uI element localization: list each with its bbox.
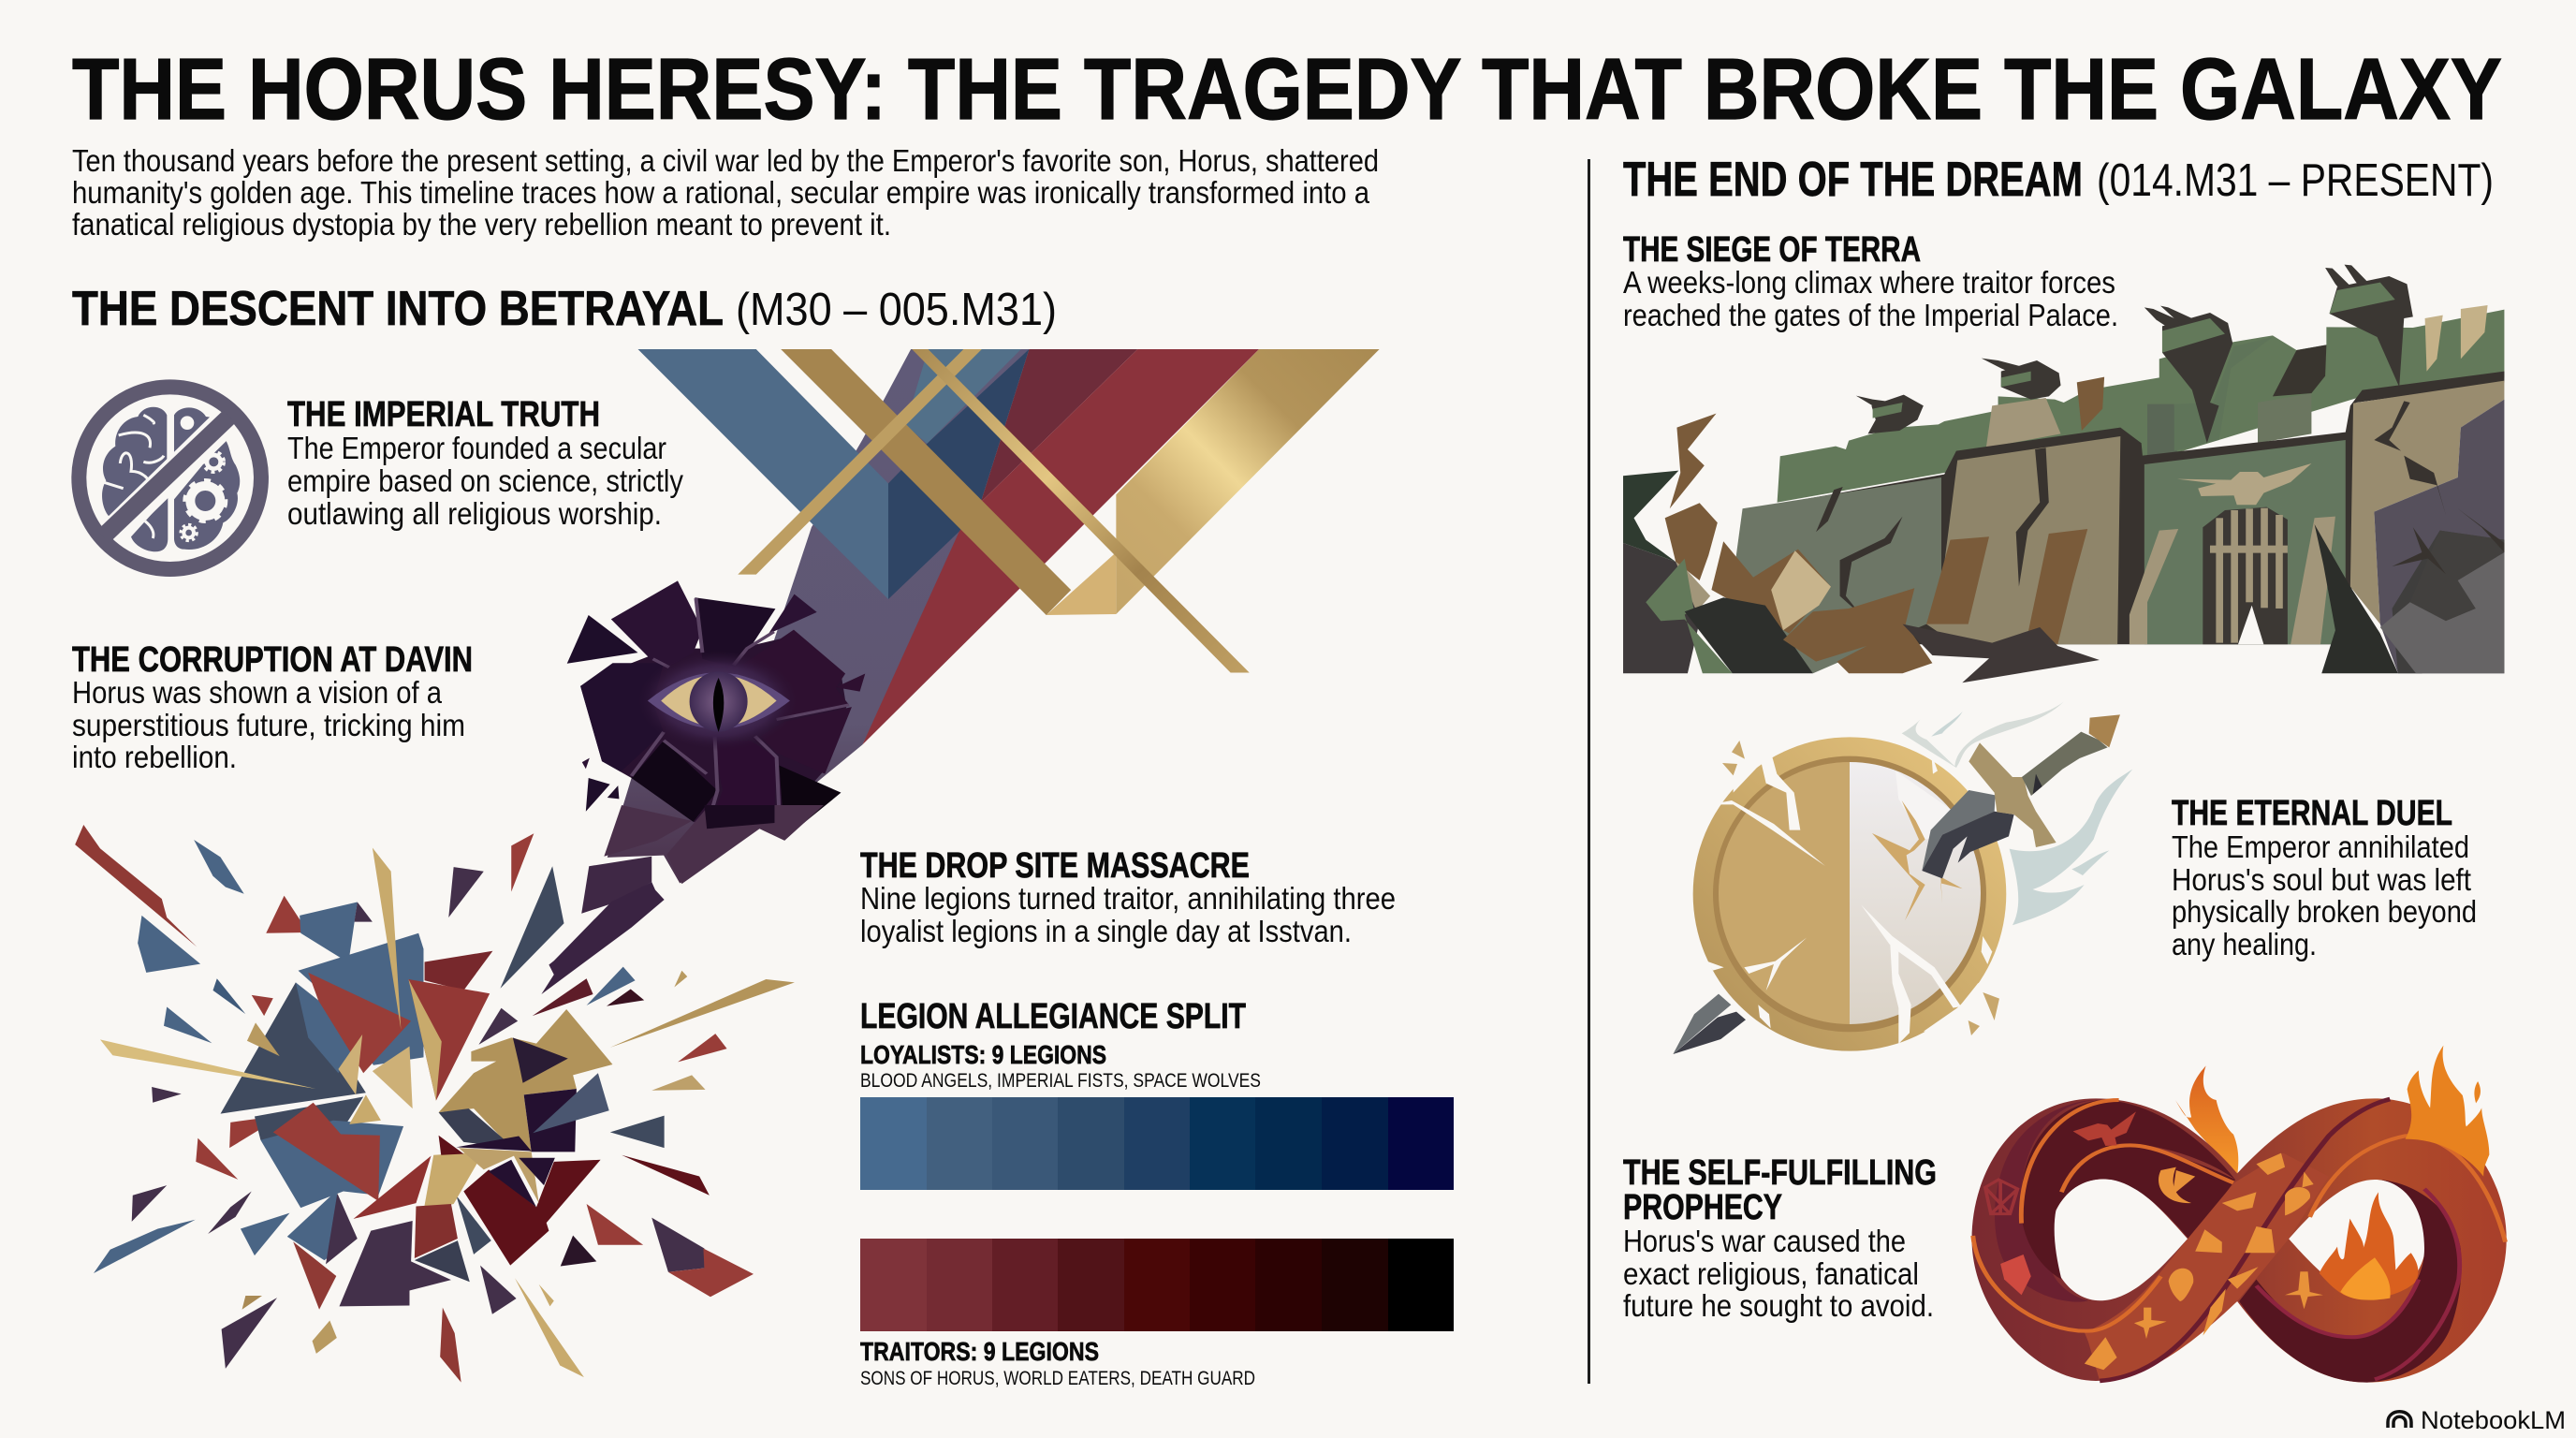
intro text: fanatical religious dystopia by the very rebellion meant to prevent it. — [72, 207, 891, 242]
block: the self-fulfilling prophecy: exact religious, fanatical — [1623, 1256, 1919, 1291]
block: the corruption at davin: THE CORRUPTION AT DAVIN — [72, 640, 473, 680]
gold chevron and crossing strips — [738, 349, 1380, 673]
label: loyalists — [860, 1040, 1261, 1092]
heading: the descent into betrayal: THE DESCENT INTO BETRAYAL — [72, 282, 724, 336]
block: the self-fulfilling prophecy: Horus's war caused the — [1623, 1224, 1906, 1258]
blue chevron — [638, 349, 1029, 599]
block: the eternal duel: THE ETERNAL DUEL — [2172, 794, 2452, 833]
rim lines — [1973, 1100, 2505, 1331]
intro text — [72, 143, 1379, 242]
illustration: fracturing chevrons and chaos eye — [567, 349, 1380, 884]
gold fissures — [1872, 800, 1963, 920]
icon: crossed-out brain and gears — [79, 387, 261, 569]
block: the eternal duel: any healing. — [2172, 927, 2317, 961]
cracks in walls — [1816, 401, 2504, 615]
column divider — [1588, 159, 1590, 1384]
label: traitors: SONS OF HORUS, WORLD EATERS, DEATH GUARD — [860, 1368, 1255, 1389]
rubble and ruined left side — [1623, 414, 2398, 682]
turrets — [1856, 265, 2413, 443]
chaos eye — [638, 651, 799, 751]
block: the self-fulfilling prophecy: PROPHECY — [1623, 1188, 1782, 1227]
shield cracks — [1694, 746, 1997, 1044]
block: the self-fulfilling prophecy: future he sought to avoid. — [1623, 1288, 1934, 1323]
block: the eternal duel — [2172, 794, 2477, 961]
pale spirit flames — [1902, 701, 2132, 925]
block: the siege of terra — [1623, 230, 2118, 332]
crimson right rim — [2256, 1189, 2460, 1379]
legion and chaos symbols — [1985, 1111, 2323, 1370]
label: traitors: TRAITORS: 9 LEGIONS — [860, 1337, 1099, 1366]
block: the drop site massacre: THE DROP SITE MASSACRE — [860, 846, 1250, 886]
red chevron — [862, 349, 1259, 744]
label: traitors — [860, 1337, 1255, 1389]
infinity body — [1972, 1098, 2507, 1383]
block: the corruption at davin: into rebellion. — [72, 740, 237, 774]
dark inner left surface — [1995, 1100, 2096, 1302]
logo: NotebookLM: NotebookLM — [2421, 1406, 2566, 1434]
illustration: siege of the imperial palace — [1623, 265, 2504, 682]
sword — [1922, 714, 2120, 878]
shield halves — [1719, 762, 1850, 1024]
illustration: burning infinity loop — [1972, 1046, 2507, 1383]
block: the eternal duel: physically broken beyond — [2172, 894, 2477, 929]
dark inner right surface — [2239, 1180, 2461, 1383]
block: the corruption at davin: Horus was shown a vision of a — [72, 675, 443, 710]
block: the drop site massacre: loyalist legions in a single day at Isstvan. — [860, 914, 1352, 948]
block: the siege of terra: THE SIEGE OF TERRA — [1623, 230, 1921, 270]
purple descent band — [607, 349, 1029, 884]
block: the siege of terra: A weeks-long climax where traitor forces — [1623, 265, 2115, 300]
heading: legion allegiance split: LEGION ALLEGIANCE SPLIT — [860, 997, 1246, 1036]
falling purple fragments — [541, 805, 824, 994]
label: loyalists: LOYALISTS: 9 LEGIONS — [860, 1040, 1106, 1069]
block: the imperial truth: empire based on science, strictly — [287, 463, 683, 498]
block: the imperial truth — [287, 395, 683, 531]
outer shards — [75, 825, 795, 1383]
wall sections — [1735, 372, 2504, 673]
heading: the end of the dream: (014.M31 – PRESENT) — [2097, 155, 2494, 206]
heading: the end of the dream: THE END OF THE DREAM — [1623, 153, 2083, 207]
heading: the descent into betrayal: (M30 – 005.M31) — [736, 285, 1057, 335]
green battlements — [1778, 305, 2504, 503]
block: the drop site massacre: Nine legions turned traitor, annihilating three — [860, 881, 1396, 916]
block: the imperial truth: THE IMPERIAL TRUTH — [287, 395, 600, 434]
block: the self-fulfilling prophecy: THE SELF-FULFILLING — [1623, 1153, 1937, 1193]
right flame in front of loop — [2406, 1046, 2489, 1177]
chaos eye shards — [567, 580, 865, 839]
heading: the end of the dream — [1623, 153, 2494, 207]
inner flame — [2320, 1192, 2418, 1299]
illustration: shattered explosion of legion shards — [75, 805, 824, 1383]
aquila emblem — [2177, 463, 2311, 505]
block: the siege of terra: reached the gates of the Imperial Palace. — [1623, 298, 2118, 332]
block: the imperial truth: outlawing all religious worship. — [287, 496, 662, 531]
block: the imperial truth: The Emperor founded a secular — [287, 431, 666, 465]
block: the corruption at davin — [72, 640, 473, 774]
diagonal band — [2085, 1153, 2329, 1381]
sword tip through shield — [1673, 994, 1746, 1054]
bar: nine loyalist legions — [860, 1097, 1454, 1190]
block: the drop site massacre — [860, 846, 1396, 948]
shield rim — [1693, 737, 2006, 1051]
illustration: cracked shield pierced by broken sword — [1673, 701, 2132, 1054]
palace gate — [2203, 507, 2288, 644]
block: the eternal duel: Horus's soul but was left — [2172, 862, 2471, 897]
block: the eternal duel: The Emperor annihilated — [2172, 829, 2469, 864]
block: the corruption at davin: superstitious future, tricking him — [72, 708, 465, 742]
label: loyalists: BLOOD ANGELS, IMPERIAL FISTS, SPACE WOLVES — [860, 1070, 1261, 1092]
intro text: humanity's golden age. This timeline traces how a rational, secular empire was ironically transformed into a — [72, 175, 1370, 210]
intro text: Ten thousand years before the present setting, a civil war led by the Emperor's favorite son, Horus, shattered — [72, 143, 1379, 178]
shield fragments — [1722, 741, 1999, 1035]
core shards — [100, 847, 612, 1310]
block: the self-fulfilling prophecy — [1623, 1153, 1937, 1323]
left flame behind loop — [2175, 1065, 2238, 1177]
turret faces — [1873, 283, 2395, 418]
bar: nine traitor legions — [860, 1239, 1454, 1331]
